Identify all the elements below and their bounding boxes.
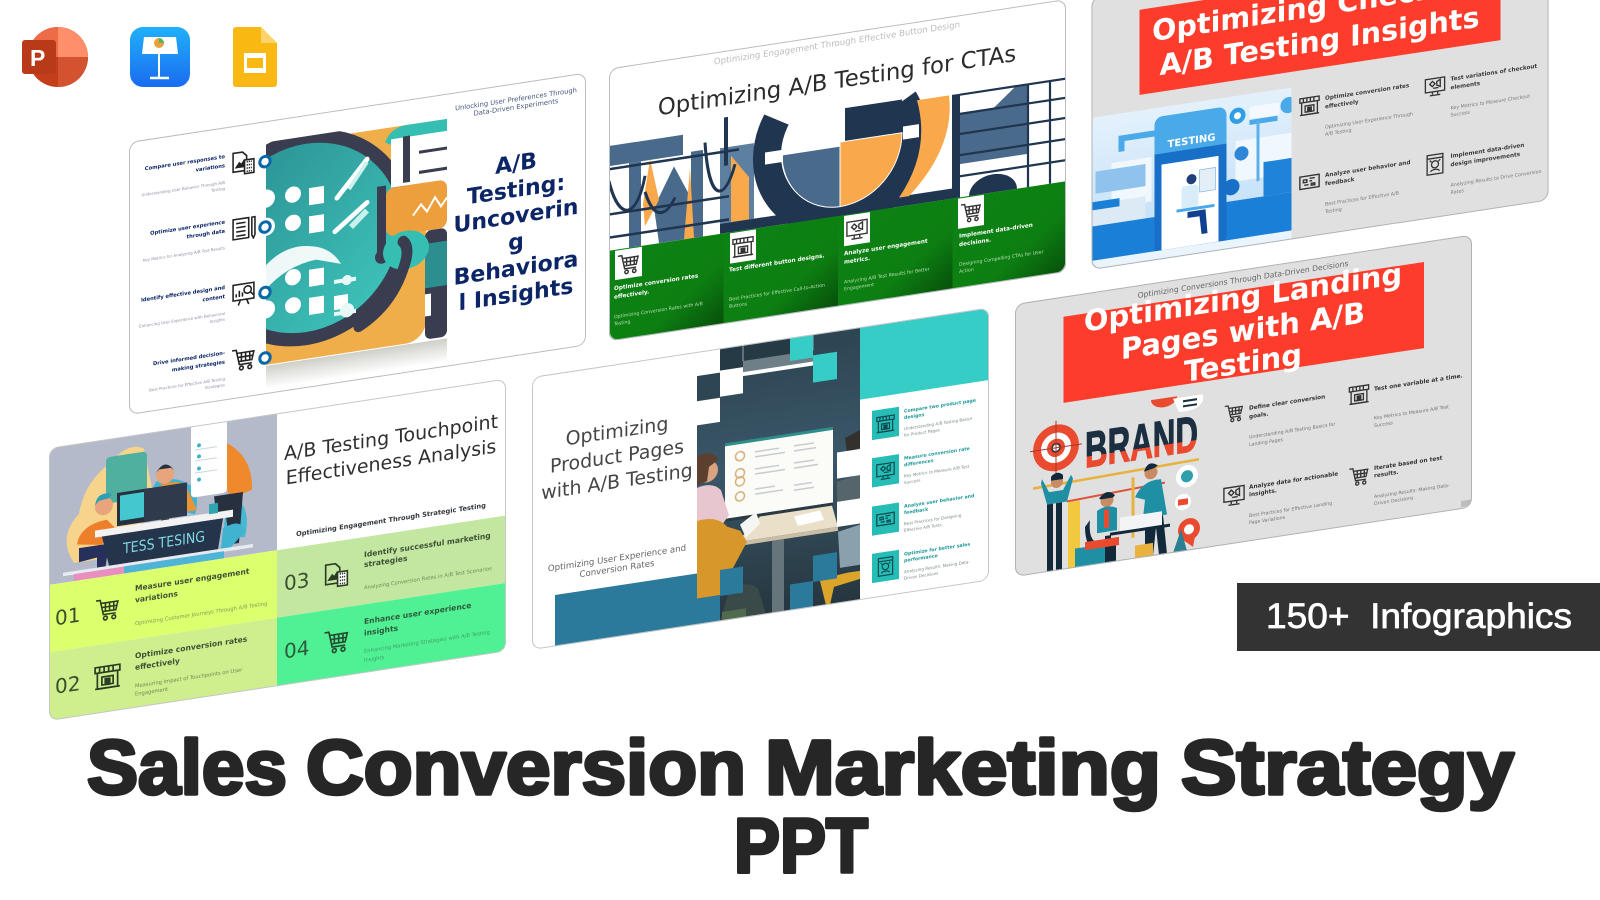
list item: actionable insights: insights. bbox=[1249, 488, 1277, 499]
list item: compare pages: designs bbox=[904, 412, 925, 421]
list item: identify design: Insights bbox=[210, 317, 225, 324]
heading: slide title bbox=[284, 414, 498, 484]
list item: iterate: Iterate based on test bbox=[1374, 456, 1443, 472]
banner: red title: Pages with A/B bbox=[1121, 295, 1365, 366]
list item: conversion goals: Understanding A/B Testing Basics for bbox=[1249, 421, 1335, 441]
row 04: Insights bbox=[364, 655, 385, 664]
panel: A/B Testing Touchpoint slide bbox=[49, 377, 506, 721]
heading: slide title bbox=[456, 152, 577, 310]
title bbox=[87, 725, 1514, 889]
list item: optimize experience: Key Metrics for Analyzing A/B Test Results bbox=[143, 245, 225, 263]
row 04: Enhance user experience bbox=[364, 601, 471, 626]
text: subtitle: Optimizing User Experience and bbox=[548, 543, 686, 574]
shape: teal header bbox=[860, 308, 989, 400]
list item: checkout elements: Test variations of checkout bbox=[1450, 64, 1537, 83]
column: button designs: Test different button designs. bbox=[729, 253, 825, 274]
list item: behavior and feedback: feedback bbox=[1325, 177, 1355, 188]
list item: checkout elements: Key Metrics to Measure Checkout bbox=[1450, 93, 1530, 112]
column: engagement metrics bbox=[838, 199, 952, 307]
row 01 bbox=[49, 550, 277, 652]
panel: Optimizing Landing Pages slide bbox=[1015, 235, 1472, 577]
column: data-driven decisions: Action bbox=[959, 267, 974, 275]
list item: actionable insights: Page Variations bbox=[1249, 515, 1286, 526]
text: subtitle: Data-Driven Experiments bbox=[474, 97, 559, 118]
list item: better sales: Driven Decisions bbox=[904, 571, 938, 581]
list item: identify design: content bbox=[202, 294, 225, 304]
icon: PowerPoint: P bbox=[30, 45, 45, 71]
list item: measure differences bbox=[872, 447, 970, 488]
column: engagement metrics: Analyze user engagement bbox=[844, 239, 928, 257]
list item: better sales: Optimize for better sales bbox=[904, 542, 970, 558]
list item: user behavior: Analyze user behavior and bbox=[904, 493, 974, 510]
list item: conversion rates: Optimize conversion rates bbox=[1325, 83, 1410, 102]
panel: Optimizing Product Pages slide bbox=[532, 306, 989, 650]
banner: red title: Testing bbox=[1184, 337, 1302, 389]
list item: user behavior: Best Practices for Designing bbox=[904, 513, 962, 526]
list item: compare pages: for Product Pages bbox=[904, 427, 940, 438]
row 02: Engagement bbox=[135, 687, 168, 698]
list item: conversion goals bbox=[1225, 390, 1335, 452]
list item: design improvements: Rates bbox=[1450, 188, 1464, 196]
row 04 bbox=[277, 583, 506, 686]
list item: checkout elements: Success bbox=[1450, 110, 1470, 119]
row 01: Optimizing Customer Journeys Through A/B Testing bbox=[135, 601, 267, 627]
title: Marketing bbox=[765, 725, 1161, 811]
text: subtitle: Optimizing Engagement Through Strategic Testing bbox=[296, 501, 486, 538]
text: subtitle: Conversion Rates bbox=[580, 559, 655, 580]
list item: iterate: Analyzing Results: Making Data- bbox=[1374, 483, 1450, 500]
column: data-driven decisions: decisions. bbox=[959, 238, 991, 248]
title: PPT bbox=[734, 803, 868, 889]
shape: blue base band bbox=[555, 570, 720, 646]
row 03: strategies bbox=[364, 554, 408, 569]
column: conversion rates bbox=[609, 233, 724, 341]
row 04: Enhancing Marketing Strategies with A/B Testing bbox=[364, 630, 490, 655]
list item: conversion rates: A/B Testing bbox=[1325, 128, 1352, 138]
illustration: team at testing desk bbox=[49, 411, 277, 585]
row 03: Identify successful marketing bbox=[364, 531, 491, 559]
list item: iterate: results. bbox=[1374, 470, 1399, 480]
banner: red title bbox=[1064, 253, 1424, 407]
list item: measure differences: differences bbox=[904, 458, 934, 468]
illustration: brand team bbox=[1030, 392, 1203, 575]
list item: measure differences: Success bbox=[904, 478, 920, 485]
list item: iterate: Driven Decisions bbox=[1374, 495, 1414, 507]
text: subtitle: Optimizing Conversions Through Data-Driven Decisions bbox=[1138, 259, 1348, 300]
column: engagement metrics: metrics. bbox=[844, 256, 870, 266]
list item: compare pages: Understanding A/B Testing Basics bbox=[904, 416, 972, 431]
heading: slide title: Uncoverin bbox=[454, 194, 578, 239]
list item: iterate bbox=[1349, 454, 1450, 511]
list item: better sales: performance bbox=[904, 553, 938, 564]
list item: design improvements bbox=[1426, 144, 1542, 194]
list item: optimize experience bbox=[143, 213, 270, 263]
illustration: testing workstation: TESTING bbox=[1168, 132, 1215, 151]
list item: checkout elements: elements bbox=[1450, 81, 1481, 91]
list item: design improvements: Implement data-driven bbox=[1450, 143, 1524, 160]
row 02 bbox=[49, 618, 277, 721]
list item: drive decisions: Best Practices for Effective A/B Testing bbox=[149, 376, 225, 393]
list item: optimize experience: through data bbox=[187, 229, 225, 240]
column: conversion rates: Optimize conversion rates bbox=[614, 273, 699, 292]
heading: slide title: g bbox=[508, 228, 524, 257]
illustration: team at testing desk: TESS TESING bbox=[122, 528, 205, 558]
list item: compare pages bbox=[872, 399, 976, 440]
list item: identify design: Identify effective design and bbox=[141, 285, 225, 304]
list item: drive decisions: Strategies bbox=[205, 382, 225, 390]
icon: Google Slides bbox=[233, 27, 277, 87]
list item: one variable: Test one variable at a time. bbox=[1374, 373, 1463, 393]
list item: identify design bbox=[140, 281, 272, 328]
heading: slide title: Product Pages bbox=[550, 435, 684, 478]
list item: compare pages: Compare two product page bbox=[904, 398, 976, 415]
heading: slide title bbox=[542, 419, 691, 499]
list item: actionable insights bbox=[1224, 471, 1338, 530]
list item: compare responses: Testing bbox=[210, 186, 225, 193]
row 01: variations bbox=[135, 589, 178, 605]
row 03: 03 bbox=[284, 568, 309, 596]
list item: one variable bbox=[1349, 371, 1463, 433]
list item: user behavior: Effective A/B Tests bbox=[904, 522, 942, 533]
list item: behavior and feedback: Testing bbox=[1324, 207, 1342, 215]
row 02: Measuring Impact of Touchpoints on User bbox=[135, 667, 243, 690]
list item: better sales: Analyzing Results: Making Data- bbox=[904, 559, 970, 574]
panel: A/B Testing Uncovering Behavioral Insights slide bbox=[129, 73, 586, 415]
list item: behavior and feedback: Best Practices for Effective A/B bbox=[1325, 190, 1399, 208]
list item: checkout elements bbox=[1424, 64, 1537, 116]
list item: actionable insights: Analyze data for actionable bbox=[1249, 471, 1338, 491]
column: data-driven decisions bbox=[952, 181, 1066, 289]
icon: Keynote bbox=[130, 27, 190, 87]
text: subtitle: Optimizing Engagement Through Effective Button Design bbox=[714, 20, 960, 68]
list item: compare responses: variations bbox=[196, 163, 225, 174]
column: button designs: Buttons bbox=[729, 301, 748, 310]
column: button designs: Best Practices for Effective Call-to-Action bbox=[729, 282, 825, 303]
banner: red title: A/B Testing Insights bbox=[1159, 0, 1480, 82]
title: Conversion bbox=[306, 725, 746, 811]
row 01: 01 bbox=[55, 603, 80, 630]
list item: behavior and feedback bbox=[1300, 160, 1410, 219]
column: engagement metrics: Analyzing A/B Test Results for Better bbox=[844, 267, 930, 286]
list item: conversion goals: goals. bbox=[1249, 412, 1269, 420]
list item: conversion goals: Define clear conversion bbox=[1249, 394, 1325, 412]
list item: user behavior bbox=[872, 491, 974, 538]
row 04: 04 bbox=[284, 636, 309, 663]
column: data-driven decisions: Implement data-driven bbox=[959, 223, 1033, 240]
illustration: abstract data ring bbox=[266, 118, 447, 386]
heading: slide title: Testing: bbox=[467, 170, 565, 210]
heading: slide title: l Insights bbox=[459, 273, 573, 316]
list item: conversion rates bbox=[1299, 84, 1412, 136]
heading: slide title: A/B bbox=[495, 148, 537, 180]
list item: actionable insights: Best Practices for Effective Landing bbox=[1249, 501, 1332, 519]
list item: conversion rates: Optimizing User Experience Through bbox=[1325, 111, 1413, 131]
column: conversion rates: Optimizing Conversion Rates with A/B bbox=[614, 301, 703, 320]
list item: compare responses bbox=[142, 151, 272, 196]
illustration: meeting room bbox=[696, 325, 860, 625]
heading: slide title: Optimizing bbox=[566, 412, 668, 450]
list item: conversion rates: effectively bbox=[1325, 99, 1359, 111]
row 02: Optimize conversion rates bbox=[135, 634, 248, 660]
column: button designs bbox=[724, 216, 838, 324]
icon: PowerPoint bbox=[22, 27, 88, 87]
badge: 150+ Infographics: 150+ Infographics bbox=[1266, 597, 1572, 636]
title: Sales bbox=[87, 725, 287, 811]
list item: behavior and feedback: Analyze user behavior and bbox=[1325, 160, 1410, 179]
row 01: Measure user engagement bbox=[135, 567, 250, 593]
list item: drive decisions: Drive informed decision- bbox=[153, 350, 225, 367]
row 03: Analyzing Conversion Rates in A/B Test Scenarios bbox=[364, 566, 492, 591]
heading: slide title: Optimizing A/B Testing for CTAs bbox=[658, 41, 1016, 121]
row 04: insights bbox=[364, 624, 399, 638]
text: subtitle: Unlocking User Preferences Through bbox=[455, 86, 577, 113]
list item: drive decisions bbox=[150, 350, 272, 392]
column: conversion rates: Testing bbox=[613, 319, 631, 328]
illustration: abstract chart shapes bbox=[610, 78, 1065, 248]
illustration: testing workstation bbox=[1092, 87, 1296, 270]
list item: measure differences: Key Metrics to Measure A/B Test bbox=[904, 464, 970, 479]
heading: slide title: with A/B Testing bbox=[541, 458, 693, 504]
list item: design improvements: design improvements bbox=[1450, 152, 1521, 168]
list item: one variable: Success bbox=[1374, 420, 1393, 429]
badge: 150+ Infographics bbox=[1237, 583, 1600, 651]
heading: slide title: Effectiveness Analysis bbox=[286, 435, 496, 490]
list item: measure differences: Measure conversion rate bbox=[904, 446, 970, 462]
row 02: effectively bbox=[135, 656, 180, 672]
row 03 bbox=[277, 515, 506, 618]
list item: compare responses: Understanding User Behavior Through A/B bbox=[142, 180, 225, 197]
title: Strategy bbox=[1181, 725, 1514, 811]
list item: compare responses: Compare user responses to bbox=[145, 154, 225, 172]
list item: optimize experience: Optimize user experience bbox=[150, 220, 225, 237]
panel: Optimizing A/B Testing for CTAs slide bbox=[609, 0, 1066, 341]
row 02: 02 bbox=[55, 671, 80, 699]
column: data-driven decisions: Designing Compelling CTAs for User bbox=[959, 249, 1043, 268]
list item: one variable: Key Metrics to Measure A/B Test bbox=[1374, 404, 1449, 422]
column: conversion rates: effectively. bbox=[614, 289, 649, 301]
heading: slide title: A/B Testing Touchpoint bbox=[284, 410, 499, 465]
list item: user behavior: feedback bbox=[904, 507, 929, 516]
banner: red title: Optimizing Landing bbox=[1084, 256, 1402, 339]
list item: drive decisions: making strategies bbox=[172, 360, 225, 374]
column: engagement metrics: Engagement bbox=[844, 282, 874, 293]
list item: design improvements: Analyzing Results to Drive Conversion bbox=[1450, 169, 1542, 189]
illustration: brand team: BRAND bbox=[1085, 404, 1198, 479]
list item: identify design: Enhancing User Experience with Behavioral bbox=[139, 311, 225, 329]
heading: slide title: Behaviora bbox=[454, 246, 578, 291]
list item: conversion goals: Landing Pages bbox=[1249, 437, 1284, 448]
list item: better sales bbox=[872, 539, 970, 586]
panel: Optimizing Checkout slide bbox=[1092, 0, 1548, 270]
